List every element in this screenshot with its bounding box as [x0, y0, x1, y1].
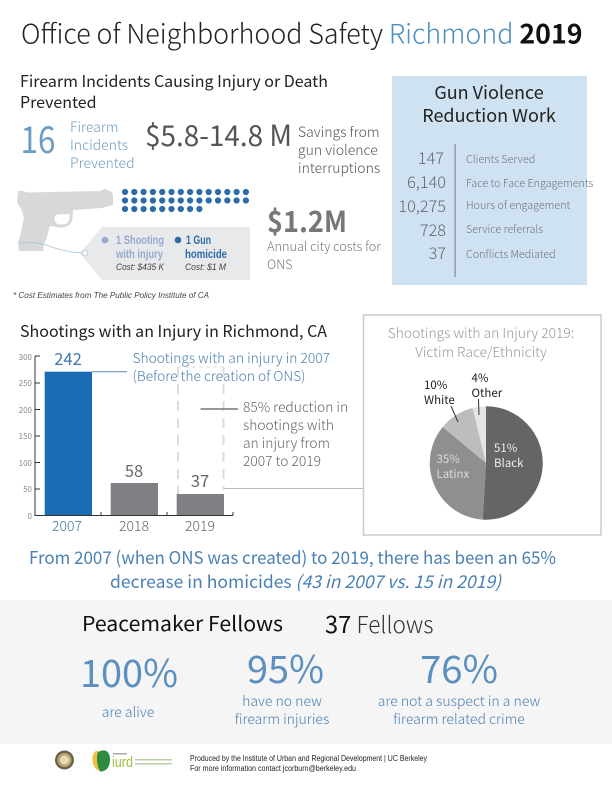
pie labels [424, 370, 524, 482]
bar chart: 242 [54, 346, 82, 370]
pie labels: 4% [472, 370, 489, 386]
panel: gun violence reduction work: 147 [418, 145, 444, 169]
bar chart: 150 [19, 431, 33, 442]
heading: firearm incidents [20, 68, 328, 113]
stat: 16 incidents prevented [20, 110, 135, 173]
panel: gun violence reduction work: Face to Face Engagements [466, 176, 594, 191]
price tag [18, 227, 250, 280]
price tag: Cost: $1 M [185, 262, 226, 272]
callout: 85% reduction: shootings with [243, 414, 334, 434]
panel: peacemaker fellows: 37 Fellows [325, 605, 434, 640]
price tag: with injury [115, 249, 163, 261]
title: Office of Neighborhood Safety Richmond 2019 [21, 12, 583, 52]
panel: peacemaker fellows: Peacemaker Fellows [82, 607, 283, 637]
panel: gun violence reduction work: Reduction Work [422, 102, 556, 128]
panel: gun violence reduction work: 6,140 [407, 169, 446, 193]
stat: 16 incidents prevented: Firearm [70, 117, 119, 137]
price tag: Cost: $435 K [116, 262, 165, 272]
panel: peacemaker fellows: firearm related crime [393, 709, 525, 729]
statement: homicide decrease: From 2007 (when ONS was created) to 2019, there has been an 65% [29, 545, 556, 570]
bar chart: 300 [19, 352, 33, 363]
stat: savings: Savings from [298, 122, 380, 142]
pie slices [430, 406, 543, 520]
footer credits: For more information contact jcorburn@berkeley.edu [190, 764, 356, 773]
heading: shootings: Shootings with an Injury in Richmond, CA [20, 318, 327, 342]
pie labels: Other [472, 385, 503, 401]
bar chart: 100 [19, 458, 33, 469]
pie labels: Black [494, 455, 524, 471]
footer credits: Produced by the Institute of Urban and Regional Development | UC Berkeley [190, 754, 427, 763]
pie labels: Latinx [436, 466, 470, 482]
panel: gun violence reduction work: 10,275 [398, 193, 446, 217]
panel: pie chart: Shootings with an Injury 2019: [388, 322, 574, 342]
bar chart: 0 [28, 511, 33, 522]
price tag: 1 Gun [186, 235, 211, 247]
stat: savings: $5.8-14.8 M [145, 113, 292, 155]
callout: 2007: Shootings with an injury in 2007 [132, 347, 330, 367]
panel: peacemaker fellows: firearm injuries [235, 709, 329, 729]
panel: pie chart [364, 315, 601, 535]
panel: peacemaker fellows: 95% [247, 639, 324, 694]
pie labels: White [424, 392, 455, 408]
panel: peacemaker fellows: are alive [102, 702, 154, 722]
panel: gun violence reduction work: Clients Served [466, 152, 535, 167]
heading: firearm incidents: Firearm Incidents Causing Injury or Death [20, 68, 328, 92]
stat: 16 incidents prevented: 16 [20, 110, 56, 164]
callout: 85% reduction: 85% reduction in [243, 396, 348, 416]
pie labels: 35% [436, 451, 460, 467]
bar chart: 58 [125, 458, 143, 482]
price tag: 1 Shooting [116, 235, 164, 247]
panel: gun violence reduction work [392, 76, 594, 285]
panel: peacemaker fellows: 100% [80, 643, 178, 698]
stat: 16 incidents prevented: Incidents [70, 135, 128, 155]
footer credits [190, 754, 427, 773]
panel: gun violence reduction work: Service referrals [466, 222, 543, 237]
panel: gun violence reduction work: 37 [429, 240, 446, 264]
panel: gun violence reduction work: 728 [420, 217, 446, 241]
dot array: incidents [122, 189, 249, 212]
bar chart: 2007 [52, 516, 82, 536]
connector to pie panel [224, 488, 364, 490]
bar chart: 250 [19, 378, 33, 389]
bar chart: 37 [191, 468, 209, 492]
callout: 2007 [92, 347, 330, 385]
panel: gun violence reduction work: Gun Violence [434, 79, 544, 105]
stat: savings [145, 113, 380, 178]
logo: IURD [92, 750, 172, 772]
footnote: * Cost Estimates from The Public Policy Institute of CA [13, 290, 209, 300]
panel: gun violence reduction work: Conflicts Mediated [466, 247, 556, 262]
statement: homicide decrease: decrease in homicides (43 in 2007 vs. 15 in 2019) [110, 569, 502, 594]
panel: gun violence reduction work: Hours of engagement [466, 198, 570, 213]
stat: annual city costs [267, 199, 381, 273]
statement: homicide decrease [29, 545, 556, 594]
pie labels: 10% [424, 377, 448, 393]
bar chart [19, 346, 233, 536]
panel: pie chart: Victim Race/Ethnicity [415, 341, 547, 361]
icon: pistol [17, 189, 113, 251]
stat: annual city costs: $1.2M [267, 199, 347, 241]
panel: peacemaker fellows: are not a suspect in a new [378, 691, 541, 711]
stat: annual city costs: Annual city costs for [267, 236, 381, 255]
logo: IURD: iurd [112, 755, 133, 771]
bar chart: 50 [23, 484, 33, 495]
logo: seal [55, 750, 74, 770]
pie labels: 51% [494, 440, 518, 456]
bar chart: 2018 [119, 516, 149, 536]
stat: annual city costs: ONS [267, 254, 293, 273]
price tag: homicide [185, 249, 227, 261]
panel: peacemaker fellows: 76% [420, 639, 498, 694]
panel: peacemaker fellows [0, 600, 612, 744]
stat: savings: gun violence [298, 140, 378, 160]
stat: savings: interruptions [298, 158, 380, 178]
callout: 2007: (Before the creation of ONS) [132, 365, 306, 385]
bar chart: 200 [19, 405, 33, 416]
callout: 85% reduction [200, 396, 348, 470]
heading: firearm incidents: Prevented [20, 89, 97, 113]
stat: 16 incidents prevented: Prevented [70, 153, 135, 173]
callout: 85% reduction: 2007 to 2019 [243, 450, 321, 470]
bar chart: 2019 [185, 516, 215, 536]
callout: 85% reduction: an injury from [243, 432, 330, 452]
panel: peacemaker fellows: have no new [242, 691, 322, 711]
